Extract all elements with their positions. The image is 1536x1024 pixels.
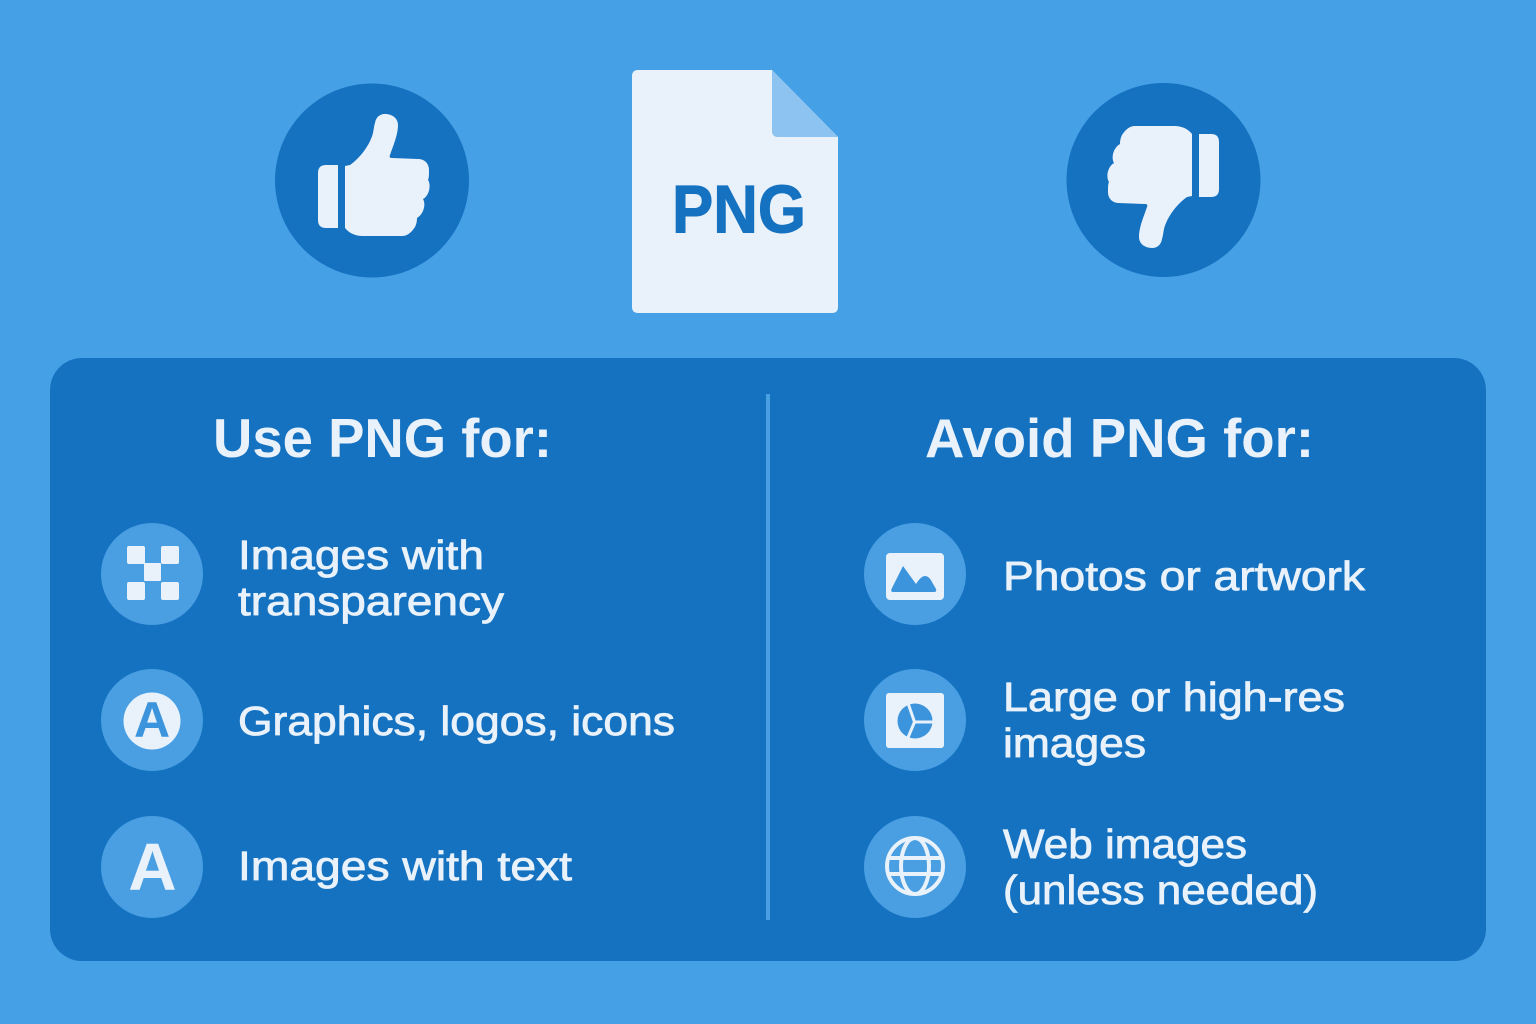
text: graphics, logos, icons: Graphics, logos, icons xyxy=(238,698,675,744)
text: images with transparency: Images with xyxy=(238,532,484,578)
icon: photo xyxy=(864,523,966,625)
text: large or high-res images: images xyxy=(1003,720,1146,766)
icon: logo badge: A xyxy=(134,692,170,748)
text: large or high-res images xyxy=(1003,674,1345,766)
icon: transparency checkerboard xyxy=(101,523,203,625)
text: images with transparency xyxy=(238,532,505,624)
icon: thumbs down xyxy=(1066,83,1260,277)
heading: use PNG for: Use PNG for: xyxy=(213,407,552,469)
icon: thumbs up xyxy=(275,84,469,278)
text: images with transparency: transparency xyxy=(238,578,505,624)
text: web images unless needed: Web images xyxy=(1003,821,1247,867)
icon: letter A xyxy=(101,816,203,918)
icon: globe xyxy=(864,816,966,918)
text: photos or artwork: Photos or artwork xyxy=(1003,553,1366,599)
heading: avoid PNG for: Avoid PNG for: xyxy=(925,407,1314,469)
icon: large image with pie xyxy=(864,669,966,771)
text: large or high-res images: Large or high-res xyxy=(1003,674,1345,720)
text: web images unless needed: (unless needed) xyxy=(1003,867,1318,913)
file label: PNG xyxy=(672,172,806,248)
icon: letter A: A xyxy=(128,830,177,905)
text: web images unless needed xyxy=(1003,821,1318,913)
panel: use and avoid comparison xyxy=(50,358,1486,961)
text: images with text: Images with text xyxy=(238,843,573,889)
icon: PNG file document xyxy=(632,70,838,313)
icon: logo badge xyxy=(101,669,203,771)
